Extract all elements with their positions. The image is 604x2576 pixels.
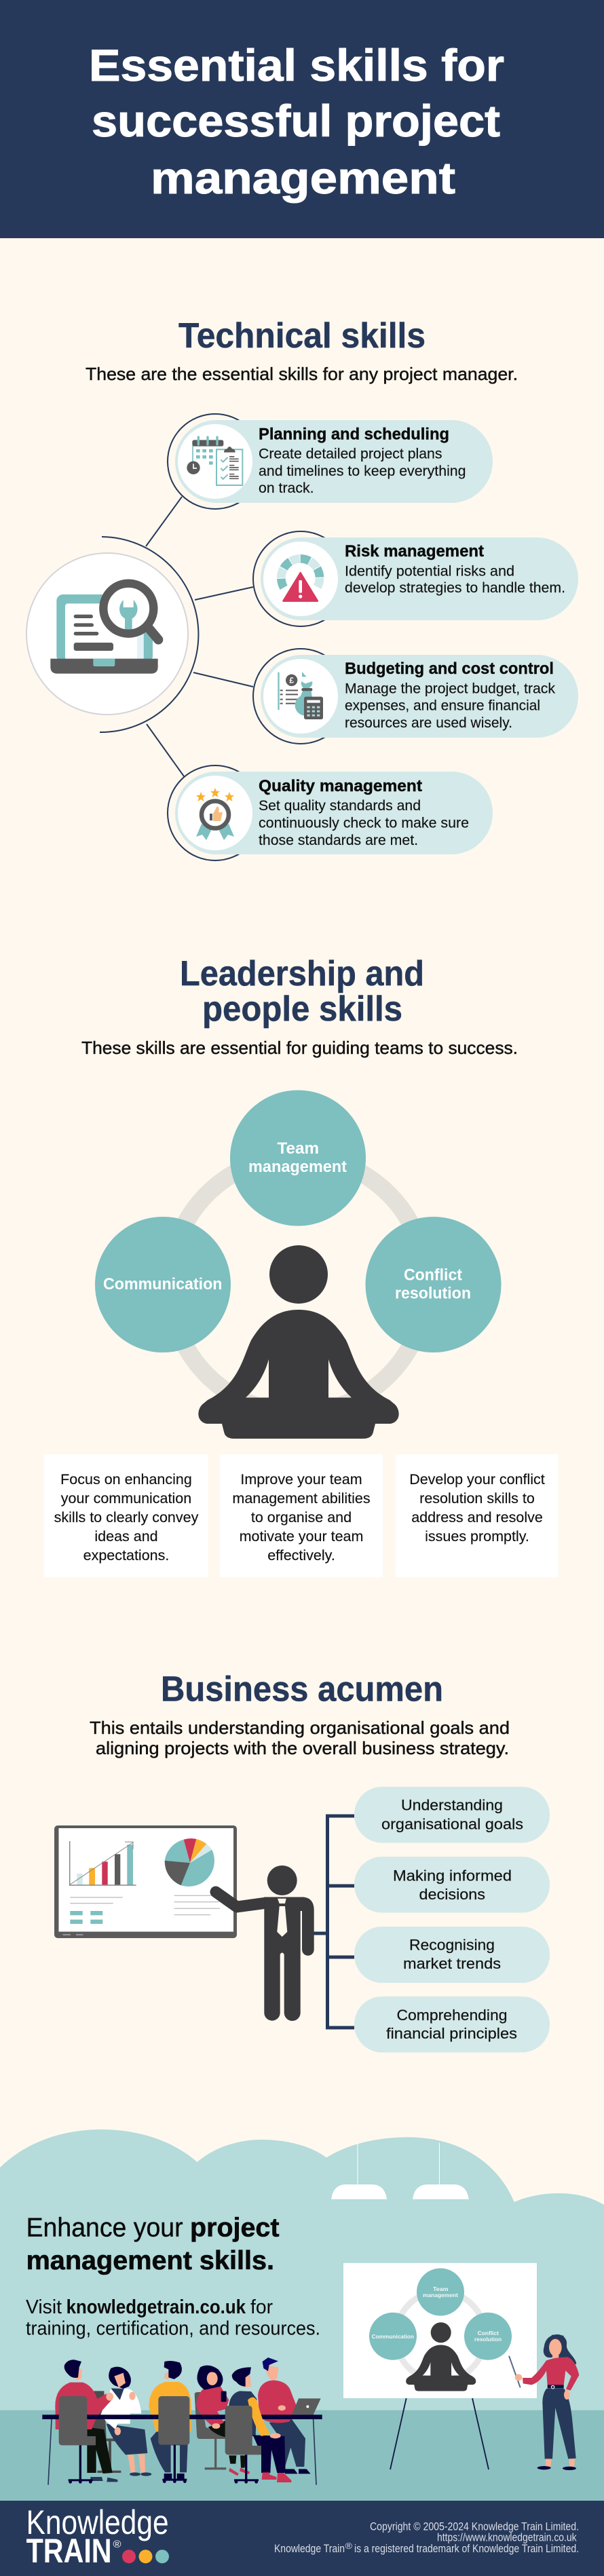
leadership intro: These skills are essential for guiding teams to success. <box>81 1038 518 1058</box>
text box: communication: ideas and <box>94 1528 158 1545</box>
icon: budget bag and calculator: £ <box>289 676 294 685</box>
panel: budgeting and cost control: expenses, and ensure financial <box>345 698 540 714</box>
heading: leadership and people skills: Leadership and <box>180 954 424 993</box>
call to action text: management skills. <box>26 2246 274 2275</box>
business acumen intro: This entails understanding organisational goals and <box>90 1718 510 1738</box>
icon: presenter silhouette <box>216 1865 314 2021</box>
miniature presentation board: management <box>423 2292 458 2298</box>
miniature presentation board: Team <box>433 2286 449 2292</box>
pill: making informed decisions <box>354 1857 550 1912</box>
logo: ® <box>113 2539 121 2550</box>
circle: team management: management <box>248 1158 347 1176</box>
heading: leadership and people skills: people skills <box>202 989 402 1029</box>
business acumen intro: aligning projects with the overall business strategy. <box>96 1738 509 1758</box>
text box: conflict resolution <box>396 1454 559 1577</box>
pill: making informed decisions: Making informed <box>393 1868 512 1884</box>
heading: business acumen: Business acumen <box>161 1669 443 1709</box>
panel: quality management: those standards are met. <box>259 832 418 848</box>
text box: communication: skills to clearly convey <box>54 1509 199 1526</box>
panel: risk management: Identify potential risks and <box>345 563 514 580</box>
panel: planning and scheduling: on track. <box>259 480 314 496</box>
woman in red <box>196 2366 250 2476</box>
title: Essential skills for <box>89 40 504 90</box>
presentation board chart <box>54 1825 237 1938</box>
call to action background <box>0 2129 604 2501</box>
text box: team management: to organise and <box>251 1509 352 1526</box>
miniature presentation board: Communication <box>372 2334 414 2340</box>
text box: team management: Improve your team <box>240 1471 362 1488</box>
text box: conflict resolution: address and resolve <box>411 1509 543 1526</box>
call to action text: for <box>250 2296 273 2318</box>
bar chart <box>70 1841 136 1885</box>
text box: conflict resolution: resolution skills to <box>419 1490 535 1507</box>
circle: communication: Communication <box>103 1275 223 1293</box>
icon: quality medal with stars <box>196 788 234 840</box>
text box: conflict resolution: Develop your conflict <box>409 1471 545 1488</box>
panel: quality management: Quality management <box>259 777 422 795</box>
man at laptop <box>258 2357 321 2474</box>
call to action text <box>26 2214 320 2340</box>
heading: leadership and people skills <box>180 954 424 1029</box>
pill: recognising market trends: market trends <box>403 1955 501 1972</box>
chair behind woman one <box>92 2391 124 2473</box>
pill: comprehending financial principles: financial principles <box>386 2025 517 2042</box>
pill: understanding organisational goals <box>354 1787 550 1843</box>
circle: communication <box>95 1217 231 1352</box>
pill: recognising market trends <box>354 1927 550 1983</box>
panel: quality management: Set quality standards and <box>259 797 421 814</box>
panel: budgeting and cost control <box>261 655 578 738</box>
pill: recognising market trends: Recognising <box>409 1937 495 1953</box>
bracket connector <box>307 1816 354 2028</box>
panel: quality management <box>175 772 493 854</box>
miniature presentation board: resolution <box>474 2336 502 2343</box>
lamps <box>331 2143 469 2199</box>
miniature presentation board <box>343 2263 537 2469</box>
logo <box>26 2503 169 2570</box>
woman in white shirt <box>100 2367 151 2476</box>
circle: conflict resolution: resolution <box>395 1284 471 1303</box>
business acumen intro <box>90 1718 510 1758</box>
text box: team management: management abilities <box>232 1490 371 1507</box>
logo: TRAIN <box>26 2532 112 2570</box>
icon: budget bag and calculator <box>278 672 323 719</box>
panel: risk management: develop strategies to handle them. <box>345 580 565 596</box>
text box: communication: Focus on enhancing <box>60 1471 192 1488</box>
pie chart <box>165 1838 214 1887</box>
heading: technical skills: Technical skills <box>178 316 426 356</box>
text box: team management: effectively. <box>267 1547 335 1564</box>
chair bases <box>69 2445 259 2484</box>
title <box>89 40 504 203</box>
man in yellow seen from back <box>149 2361 191 2479</box>
panel: budgeting and cost control: resources are used wisely. <box>345 715 512 731</box>
icon: meditating person <box>198 1245 399 1439</box>
text box: communication: expectations. <box>83 1547 169 1564</box>
circle: team management: Team <box>277 1139 319 1158</box>
pill: comprehending financial principles: Comprehending <box>396 2007 508 2024</box>
call to action text: training, certification, and resources. <box>26 2318 320 2340</box>
leadership diagram <box>95 1090 501 1439</box>
icon: calendar and checklist <box>187 437 242 485</box>
table <box>42 2414 322 2485</box>
call to action text: Enhance your <box>26 2214 183 2242</box>
circle: conflict resolution: Conflict <box>404 1266 462 1284</box>
circle: team management <box>230 1090 366 1226</box>
title: management <box>151 153 455 203</box>
panel: budgeting and cost control: Budgeting and cost control <box>345 660 554 678</box>
icon: laptop with magnifier <box>26 553 188 715</box>
footer <box>0 2501 604 2576</box>
text box: conflict resolution: issues promptly. <box>425 1528 529 1545</box>
panel: budgeting and cost control: Manage the project budget, track <box>345 680 555 696</box>
pill: making informed decisions: decisions <box>419 1886 485 1903</box>
circle: conflict resolution <box>365 1217 501 1352</box>
header banner <box>0 0 604 238</box>
logo: Knowledge <box>26 2503 169 2541</box>
panel: risk management: Risk management <box>345 542 484 561</box>
call to action text: knowledgetrain.co.uk <box>67 2296 246 2318</box>
call to action text: Visit <box>26 2296 62 2318</box>
chair behind woman two <box>195 2392 226 2469</box>
illustration: team around table <box>42 2357 322 2485</box>
text box: communication <box>44 1454 208 1577</box>
pill: comprehending financial principles <box>354 1996 550 2052</box>
man in red seen from back <box>55 2360 117 2482</box>
panel: planning and scheduling: and timelines to keep everything <box>259 463 466 479</box>
front chairs <box>59 2396 261 2455</box>
panel: quality management: continuously check to make sure <box>259 814 469 831</box>
technical skills connector diagram <box>100 414 348 860</box>
man in navy vest seen from back <box>229 2367 291 2482</box>
pill: understanding organisational goals: organisational goals <box>381 1816 523 1832</box>
technical skills intro: These are the essential skills for any project manager. <box>86 364 518 384</box>
call to action text: project <box>190 2214 280 2242</box>
miniature presentation board: Conflict <box>478 2330 499 2336</box>
text box: team management <box>220 1454 383 1577</box>
title: successful project <box>92 96 500 146</box>
panel: risk management <box>261 537 578 620</box>
text box: communication: your communication <box>61 1490 191 1507</box>
text box: team management: motivate your team <box>240 1528 363 1545</box>
copyright <box>274 2520 579 2555</box>
copyright: Knowledge Train <box>274 2542 345 2555</box>
panel: planning and scheduling <box>175 420 493 503</box>
copyright: https://www.knowledgetrain.co.uk <box>437 2531 577 2544</box>
panel: planning and scheduling: Create detailed project plans <box>259 445 442 461</box>
panel: planning and scheduling: Planning and scheduling <box>259 425 449 444</box>
icon: risk gauge and warning triangle <box>281 558 320 601</box>
illustration: presenter woman <box>509 2334 579 2470</box>
copyright: ® <box>345 2541 352 2551</box>
pill: understanding organisational goals: Understanding <box>401 1797 503 1814</box>
